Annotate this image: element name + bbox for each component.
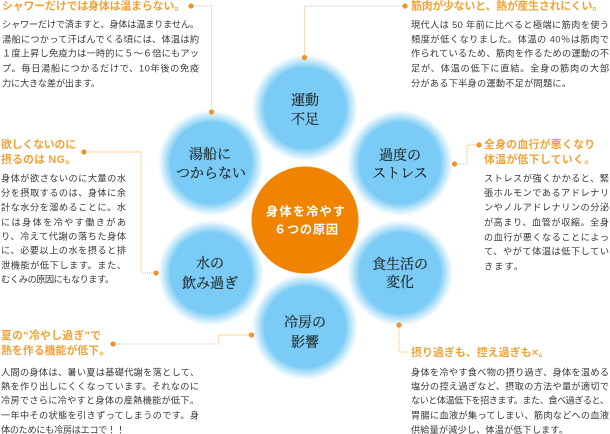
connector: 筋肉 to 運動不足 — [302, 3, 408, 60]
body text: ストレスが強くかかると、緊 — [484, 172, 609, 184]
body text: プ。毎日湯船につかるだけで、10年後の免疫 — [2, 62, 199, 74]
body text: 分がある下半身の運動不足が問題に。 — [411, 78, 571, 88]
body text: 湯船につかって汗ばんでくる頃には、体温は約 — [2, 34, 199, 44]
heading: 夏の“冷やし過ぎ”で — [1, 328, 101, 342]
body text: 計な水分を溜めることに。水 — [1, 202, 126, 212]
circle: 水の飲み過ぎ: 水の — [196, 255, 224, 272]
body text: 現代人は 50 年前に比べると極端に筋肉を使う — [411, 19, 609, 30]
body text: て、やがて体温は低下してい — [484, 246, 609, 256]
circle: 湯船につからない — [158, 110, 264, 216]
body text: には身体を冷やす働きがあ — [1, 216, 126, 228]
body text: 力に大きな差が出ます。 — [2, 78, 100, 88]
heading — [1, 137, 76, 166]
circle: 食生活の変化 — [347, 220, 453, 326]
body text: が高まり、血管が収縮。全身 — [484, 216, 609, 228]
text block: 欲しくないのに摂るのはNG — [1, 137, 126, 284]
body text: 分を摂取するのは、身体に余 — [1, 187, 126, 198]
body text: ないと体温低下を招きます。また、食べ過ぎると、 — [411, 394, 609, 406]
body text: の血行が悪くなることによっ — [484, 232, 609, 242]
body text: 人間の身体は、暑い夏は基礎代謝を落として、 — [1, 366, 199, 378]
circle: 運動不足: 運動 — [291, 93, 319, 109]
circle: 冷房の影響 — [252, 274, 358, 380]
connector: 水 — [81, 149, 159, 276]
heading — [1, 328, 110, 357]
connector: 冷房 — [110, 332, 254, 347]
body text: １度上昇し免疫力は一時的に５～６倍にもアッ — [2, 48, 199, 58]
circle: 湯船につからない: 湯船に — [189, 147, 231, 163]
body text: に、必要以上の水を摂ると排 — [1, 244, 126, 256]
body text: 胃腸に血液が集ってしまい、筋肉などへの血液 — [411, 410, 609, 420]
body text: り、冷えて代謝の落ちた身体 — [1, 230, 126, 242]
body text: 熱を作り出しにくくなっています。それなのに — [1, 380, 199, 392]
circle: 冷房の影響: 冷房の — [284, 315, 326, 331]
body text: 身体が欲さないのに大量の水 — [1, 172, 126, 184]
diagram: six causes around centre — [158, 55, 453, 380]
heading: 筋肉が少ないと、熱が産生されにくい。 — [411, 0, 603, 12]
circle: 過度のストレス: ストレス — [372, 167, 428, 182]
centre circle: 身体を冷やす6つの原因 — [252, 166, 358, 274]
connector: シャワー to 湯船 — [188, 3, 214, 115]
heading: 欲しくないのに — [1, 137, 76, 151]
heading: 摂り過ぎも、控え過ぎも×。 — [411, 345, 549, 359]
body text: 一年中その状態を引きずってしまうのです。身 — [1, 410, 199, 420]
heading: 熱を作る機能が低下。 — [1, 343, 110, 357]
text block: 夏の冷やし過ぎで熱を作る機能が低下 — [1, 328, 199, 434]
body text: 足が、体温の低下に直結。全身の筋肉の大部 — [411, 62, 609, 74]
heading: 体温が低下していく。 — [484, 152, 595, 166]
circle: 過度のストレス — [347, 110, 453, 216]
body text: 頻度が低くなりました。体温の 40％は筋肉で — [411, 34, 609, 44]
circle: 過度のストレス: 過度の — [379, 147, 421, 164]
text block: 筋肉が少ないと、熱が産生されにくい — [411, 0, 609, 88]
body text — [411, 19, 609, 88]
body text — [411, 366, 609, 434]
heading — [484, 137, 595, 166]
body text: シャワーだけで済ますと、身体は温まりません。 — [2, 18, 199, 30]
circle: 冷房の影響: 影響 — [291, 335, 319, 351]
centre circle: 身体を冷やす6つの原因: 身体を冷やす — [266, 204, 345, 218]
circle: 運動不足: 不足 — [291, 112, 319, 128]
circle: 食生活の変化: 変化 — [386, 274, 414, 291]
body text: 冷房でさらに冷やすと身体の産熱機能が低下。 — [1, 394, 199, 406]
body text: 張ホルモンであるアドレナリ — [484, 188, 609, 198]
circle: 水の飲み過ぎ — [158, 220, 264, 326]
body text — [484, 172, 609, 272]
body text: 身体を冷やす食べ物の摂り過ぎ、身体を温める — [411, 366, 609, 378]
centre circle: 身体を冷やす6つの原因: ６つの原因 — [274, 222, 338, 236]
body text: 作られているため、筋肉を作るための運動の不 — [411, 48, 609, 58]
circle: 食生活の変化: 食生活の — [372, 256, 428, 273]
body text: ンやノルアドレナリンの分泌 — [484, 202, 609, 212]
text block: シャワーだけでは身体は温まらない — [2, 0, 199, 88]
body text: きます。 — [484, 262, 523, 272]
body text: 塩分の控え過ぎなど、摂取の方法や量が適切で — [411, 380, 609, 392]
heading: シャワーだけでは身体は温まらない。 — [2, 0, 185, 12]
circle: 湯船につからない: つからない — [176, 166, 246, 182]
body text: 泄機能が低下します。また、 — [1, 260, 126, 270]
body text — [1, 366, 199, 434]
body text — [1, 172, 126, 284]
connector: 食生活 — [396, 322, 407, 352]
body text: むくみの原因にもなります。 — [1, 274, 114, 284]
body text — [2, 18, 199, 88]
heading: 全身の血行が悪くなり — [484, 137, 595, 151]
text block: 摂り過ぎも、控え過ぎも× — [411, 345, 609, 434]
heading: 摂るのは NG。 — [1, 152, 76, 166]
connector: ストレス — [452, 142, 482, 167]
circle: 運動不足 — [252, 55, 358, 161]
circle: 水の飲み過ぎ: 飲み過ぎ — [182, 276, 238, 292]
text block: 全身の血行が悪くなり体温が低下していく — [484, 137, 609, 272]
